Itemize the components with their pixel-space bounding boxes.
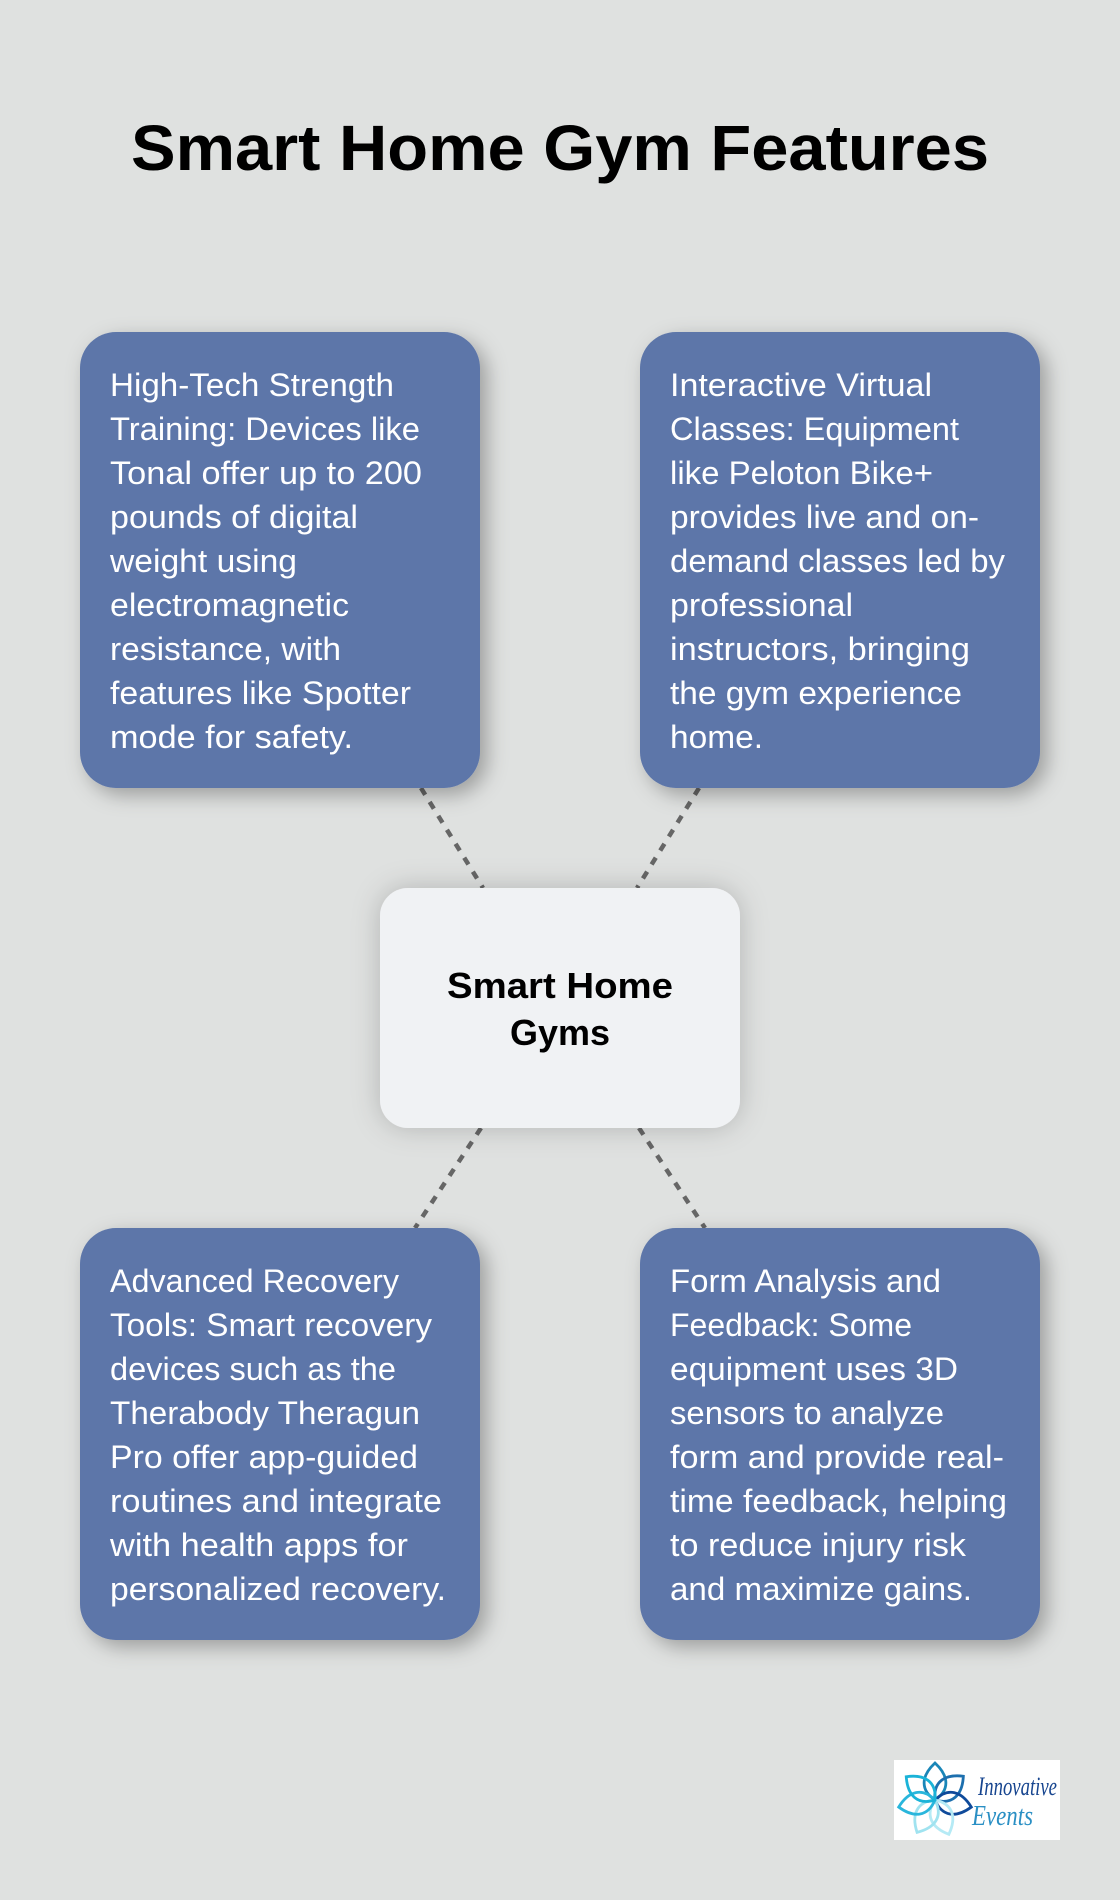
panel: form analysis and feedback: form and provide real- xyxy=(670,1439,1004,1475)
connector: top left xyxy=(421,788,483,888)
panel: high-tech strength training: electromagnetic xyxy=(110,587,349,623)
panel: interactive virtual classes: Interactive Virtual xyxy=(670,367,932,403)
panel: form analysis and feedback: and maximize gains. xyxy=(670,1571,972,1607)
icon: lotus flower xyxy=(897,1763,973,1838)
panel: interactive virtual classes: provides live and on- xyxy=(670,499,979,535)
panel: central hub: Gyms xyxy=(510,1012,610,1053)
panel: advanced recovery tools: routines and integrate xyxy=(110,1483,442,1519)
panel: central hub xyxy=(380,888,740,1128)
logo xyxy=(894,1760,1060,1840)
panel: interactive virtual classes: instructors, bringing xyxy=(670,631,970,667)
panel: form analysis and feedback: time feedback, helping xyxy=(670,1483,1007,1519)
panel: form analysis and feedback: Feedback: Some xyxy=(670,1307,912,1343)
panel: form analysis and feedback: sensors to analyze xyxy=(670,1395,944,1431)
panel: advanced recovery tools: devices such as the xyxy=(110,1351,396,1387)
panel: interactive virtual classes xyxy=(640,332,1040,788)
panel: high-tech strength training: Tonal offer up to 200 xyxy=(110,455,422,491)
panel: interactive virtual classes: like Peloton Bike+ xyxy=(670,455,933,491)
panel: high-tech strength training: pounds of digital xyxy=(110,499,358,535)
panel: form analysis and feedback xyxy=(640,1228,1040,1640)
panel: interactive virtual classes: demand classes led by xyxy=(670,543,1005,579)
connector: bottom right xyxy=(639,1128,705,1228)
logo text: Events: Events xyxy=(971,1801,1033,1832)
panel: advanced recovery tools: Therabody Theragun xyxy=(110,1395,420,1431)
panel: form analysis and feedback: equipment uses 3D xyxy=(670,1351,958,1387)
panel: interactive virtual classes: Classes: Equipment xyxy=(670,411,959,447)
panel: advanced recovery tools: personalized recovery. xyxy=(110,1571,446,1607)
panel: high-tech strength training: mode for safety. xyxy=(110,719,353,755)
connector: top right xyxy=(637,788,699,888)
panel: high-tech strength training xyxy=(80,332,480,788)
panel: high-tech strength training: weight using xyxy=(109,543,297,579)
panel: central hub: Smart Home xyxy=(447,965,673,1006)
panel: advanced recovery tools: Pro offer app-guided xyxy=(110,1439,418,1475)
panel: high-tech strength training: features like Spotter xyxy=(110,675,411,711)
panel: high-tech strength training: Training: Devices like xyxy=(110,411,420,447)
panel: high-tech strength training: High-Tech Strength xyxy=(110,367,394,403)
panel: advanced recovery tools: Tools: Smart recovery xyxy=(110,1307,432,1343)
panel: high-tech strength training: resistance, with xyxy=(110,631,341,667)
panel: interactive virtual classes: home. xyxy=(670,719,763,755)
title: Smart Home Gym Features xyxy=(131,112,989,184)
logo text: Innovative: Innovative xyxy=(977,1772,1057,1801)
panel: advanced recovery tools: with health apps for xyxy=(109,1527,408,1563)
panel: form analysis and feedback: to reduce injury risk xyxy=(670,1527,967,1563)
connector: bottom left xyxy=(415,1128,481,1228)
panel: interactive virtual classes: the gym experience xyxy=(670,675,962,711)
panel: interactive virtual classes: professional xyxy=(670,587,853,623)
panel: advanced recovery tools: Advanced Recovery xyxy=(110,1263,399,1299)
panel: advanced recovery tools xyxy=(80,1228,480,1640)
panel: form analysis and feedback: Form Analysis and xyxy=(670,1263,941,1299)
